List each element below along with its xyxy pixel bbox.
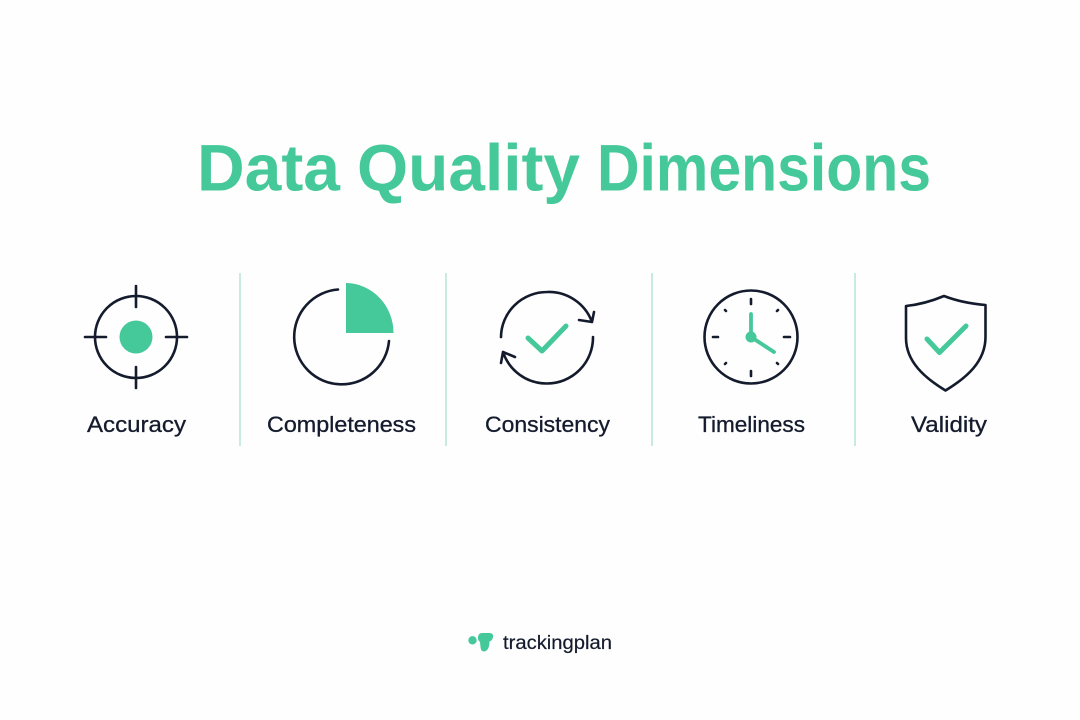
icon: pie quarter bbox=[294, 283, 394, 384]
logo wordmark: trackingplan bbox=[503, 633, 612, 654]
icon: shield check bbox=[906, 296, 986, 390]
icon: target bbox=[85, 286, 187, 388]
panel: consistency bbox=[485, 292, 610, 437]
label: validity: Validity bbox=[911, 412, 987, 437]
icon: clock bbox=[704, 290, 798, 384]
title: Quality bbox=[357, 130, 580, 204]
title: Data bbox=[197, 130, 341, 204]
label: consistency: Consistency bbox=[485, 412, 610, 437]
logo: trackingplan bbox=[468, 633, 612, 654]
label: timeliness: Timeliness bbox=[698, 412, 805, 437]
panel: accuracy bbox=[85, 286, 187, 437]
icon: refresh check bbox=[501, 292, 594, 384]
label: accuracy: Accuracy bbox=[87, 412, 186, 437]
panel: completeness bbox=[267, 283, 416, 437]
icon: logo mark bbox=[468, 633, 493, 652]
title: Dimensions bbox=[597, 130, 931, 204]
title bbox=[197, 130, 931, 204]
panel: validity bbox=[906, 296, 987, 437]
panel: timeliness bbox=[698, 290, 805, 437]
label: completeness: Completeness bbox=[267, 412, 416, 437]
